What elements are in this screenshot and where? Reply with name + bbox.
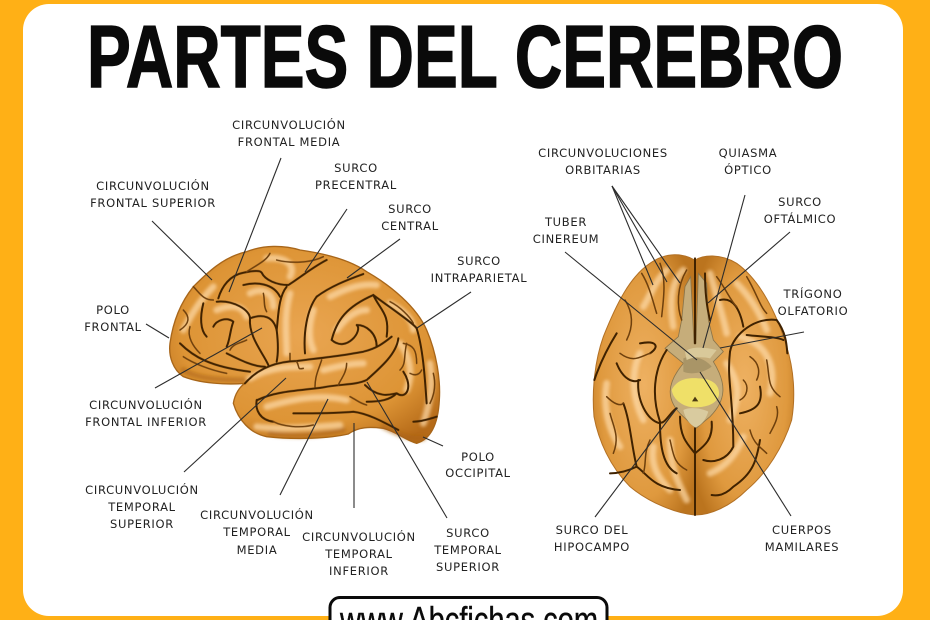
optic region [665, 273, 723, 428]
labels: lateral view: TEMPORAL [107, 500, 176, 514]
illustration: lateral view of the brain [170, 246, 440, 443]
labels: inferior view: CIRCUNVOLUCIONES [538, 146, 668, 160]
labels: lateral view: SURCO [457, 254, 501, 268]
labels: lateral view: MEDIA [237, 543, 277, 557]
labels: inferior view: OLFATORIO [778, 304, 848, 318]
labels: inferior view: ÓPTICO [724, 162, 772, 177]
illustration: inferior view of the brain [593, 255, 794, 515]
labels: lateral view: SURCO [334, 161, 378, 175]
labels: inferior view: CINEREUM [533, 232, 599, 246]
labels: lateral view [84, 117, 527, 578]
labels: lateral view: TEMPORAL [324, 547, 393, 561]
labels: lateral view: POLO [461, 450, 495, 464]
labels: lateral view: POLO [96, 303, 130, 317]
labels: lateral view: SUPERIOR [110, 517, 174, 531]
labels: lateral view: CIRCUNVOLUCIÓN [200, 507, 314, 522]
labels: inferior view: ORBITARIAS [565, 163, 641, 177]
labels: lateral view: SURCO [446, 526, 490, 540]
labels: lateral view: FRONTAL [84, 320, 142, 334]
labels: lateral view: INFERIOR [329, 564, 389, 578]
labels: lateral view: OCCIPITAL [445, 466, 511, 480]
labels: inferior view: TRÍGONO [783, 286, 842, 301]
labels: lateral view: SUPERIOR [436, 560, 500, 574]
leader lines [146, 158, 804, 518]
labels: inferior view: MAMILARES [765, 540, 839, 554]
labels: lateral view: CIRCUNVOLUCIÓN [302, 529, 416, 544]
yellow centre [672, 378, 719, 407]
labels: inferior view: TUBER [544, 215, 587, 229]
labels: inferior view: OFTÁLMICO [764, 211, 836, 226]
labels: lateral view: TEMPORAL [222, 525, 291, 539]
labels: lateral view: FRONTAL MEDIA [238, 135, 340, 149]
labels: inferior view: HIPOCAMPO [554, 540, 630, 554]
labels: inferior view: SURCO [778, 195, 822, 209]
labels: lateral view: TEMPORAL [433, 543, 502, 557]
labels: lateral view: INTRAPARIETAL [431, 271, 527, 285]
labels: lateral view: CIRCUNVOLUCIÓN [232, 117, 346, 132]
labels: lateral view: SURCO [388, 202, 432, 216]
labels: lateral view: PRECENTRAL [315, 178, 397, 192]
labels: lateral view: FRONTAL SUPERIOR [90, 196, 216, 210]
labels: lateral view: FRONTAL INFERIOR [85, 415, 207, 429]
labels: inferior view [533, 146, 848, 554]
labels: lateral view: CENTRAL [381, 219, 439, 233]
labels: inferior view: QUIASMA [719, 146, 777, 160]
labels: inferior view: CUERPOS [772, 523, 832, 537]
labels: inferior view: SURCO DEL [556, 523, 628, 537]
labels: lateral view: CIRCUNVOLUCIÓN [89, 397, 203, 412]
labels: lateral view: CIRCUNVOLUCIÓN [85, 482, 199, 497]
labels: lateral view: CIRCUNVOLUCIÓN [96, 178, 210, 193]
